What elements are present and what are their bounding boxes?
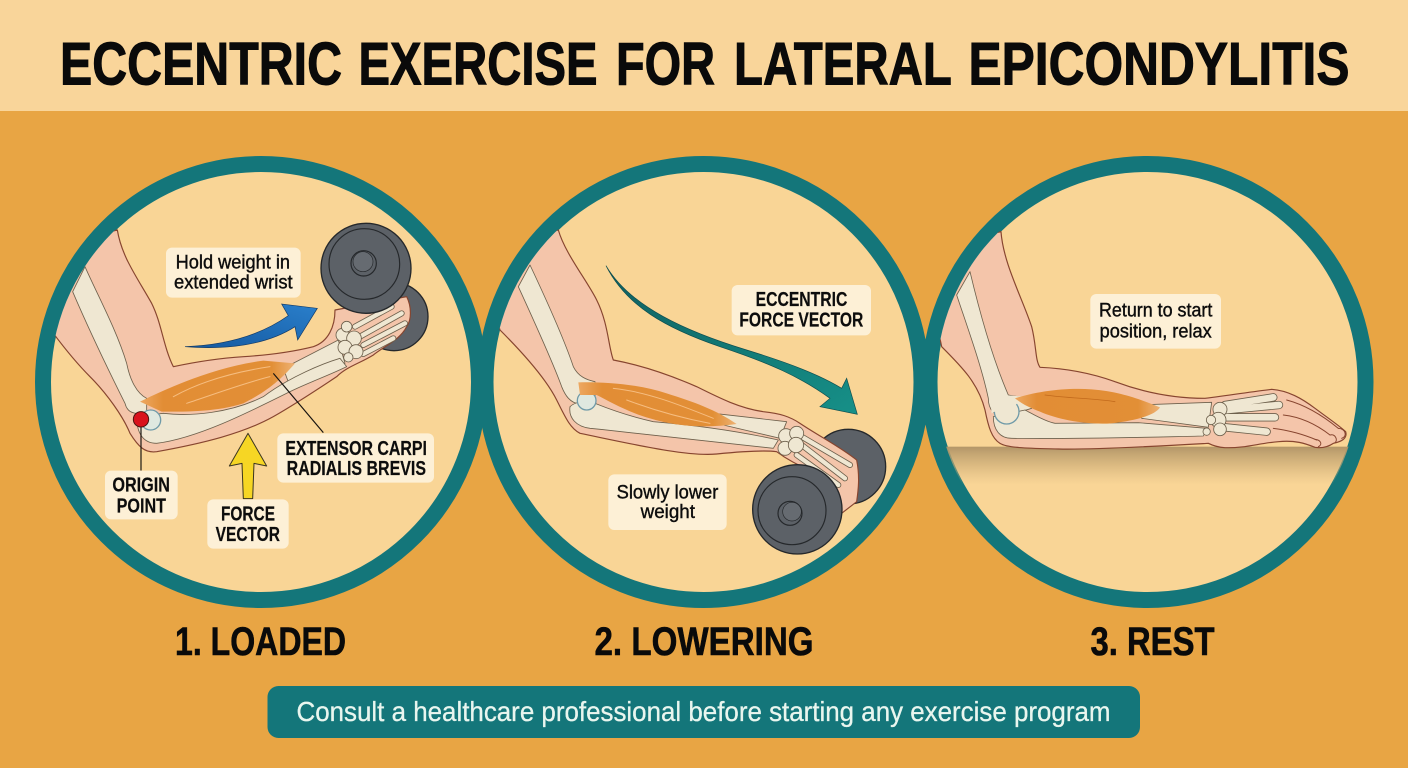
radius bone xyxy=(285,340,346,381)
label: force vector: VECTOR xyxy=(216,524,280,546)
hand bones xyxy=(355,307,405,354)
panel: step 1 loaded circle xyxy=(43,164,479,600)
disclaimer banner: Consult a healthcare professional before starting any exercise program xyxy=(296,696,1110,727)
hand bones inner xyxy=(797,437,850,485)
table surface xyxy=(946,446,1348,484)
icon: dumbbell rear plate xyxy=(824,428,886,504)
title: LATERAL xyxy=(734,30,951,98)
label: extensor carpi radialis brevis xyxy=(277,433,434,483)
label: hold weight: Hold weight in xyxy=(176,252,290,273)
label: return to start: Return to start xyxy=(1099,301,1213,322)
arm skin xyxy=(477,230,859,513)
disclaimer banner xyxy=(268,686,1140,738)
humerus bone xyxy=(73,267,147,414)
icon: dumbbell front plate xyxy=(753,465,842,554)
label: slowly lower weight xyxy=(608,474,727,530)
muscle: extensor carpi radialis brevis xyxy=(140,361,295,412)
label: eccentric force vector: FORCE VECTOR xyxy=(739,310,864,332)
lower humerus end xyxy=(991,395,1022,414)
finger creases xyxy=(1273,400,1338,440)
label: extensor carpi radialis brevis: EXTENSOR CARPI xyxy=(285,438,427,460)
ulna bone xyxy=(993,410,1207,439)
marker: origin point xyxy=(133,412,149,427)
title: EXERCISE xyxy=(358,30,598,98)
arrow: blue motion xyxy=(185,304,317,348)
panel: step 3 rest circle xyxy=(930,164,1366,600)
label: origin point xyxy=(105,471,178,519)
carpal bones xyxy=(336,321,363,362)
humerus bone xyxy=(518,265,595,404)
ulna bone xyxy=(137,358,347,443)
title: ECCENTRIC xyxy=(60,30,342,98)
label: origin point: ORIGIN xyxy=(112,475,170,497)
illustration: lowering arm with dumbbell xyxy=(477,230,886,554)
carpal bones xyxy=(1203,402,1227,436)
leader line: muscle xyxy=(273,373,323,433)
ulna bone xyxy=(570,402,778,448)
illustration: loaded arm with dumbbell xyxy=(33,223,434,549)
label: force vector xyxy=(207,499,289,549)
muscle: extensor xyxy=(578,382,737,426)
step heading 1: 1. LOADED xyxy=(175,620,346,664)
icon: dumbbell front plate xyxy=(321,223,411,313)
radius bone xyxy=(1138,402,1212,427)
origin point ring xyxy=(141,410,161,430)
elbow joint ring xyxy=(994,399,1019,424)
label: hold weight: extended wrist xyxy=(174,272,293,293)
muscle fibres xyxy=(1045,395,1115,402)
label: return to start: position, relax xyxy=(1100,321,1212,342)
illustration: resting arm on table xyxy=(922,232,1372,485)
hand bones xyxy=(797,437,850,485)
arrow: teal eccentric force xyxy=(606,266,857,414)
title: FOR xyxy=(616,30,715,98)
label: extensor carpi radialis brevis: RADIALIS BREVIS xyxy=(287,458,426,480)
elbow joint ring xyxy=(577,391,596,410)
label: force vector: FORCE xyxy=(221,504,275,526)
hand bones inner xyxy=(1225,397,1279,432)
panel: step 2 lowering circle xyxy=(486,164,922,600)
icon: dumbbell rear plate xyxy=(382,285,429,352)
arrow: yellow force vector xyxy=(229,433,267,499)
fingernails xyxy=(1315,428,1345,447)
hand bones xyxy=(1225,397,1279,432)
step heading 2: 2. LOWERING xyxy=(594,620,814,664)
humerus bone xyxy=(957,272,1032,417)
leader line: origin xyxy=(139,427,143,471)
label: return to start xyxy=(1090,294,1221,349)
label: slowly lower weight: Slowly lower xyxy=(617,482,719,503)
muscle fibres xyxy=(613,388,713,423)
step heading 3: 3. REST xyxy=(1090,620,1214,664)
muscle fibres xyxy=(173,367,270,403)
label: eccentric force vector xyxy=(732,285,871,335)
header band xyxy=(0,0,1408,111)
label: eccentric force vector: ECCENTRIC xyxy=(756,289,847,311)
label: slowly lower weight: weight xyxy=(640,502,696,523)
hand bones inner xyxy=(355,307,405,354)
arm skin xyxy=(33,230,410,452)
label: origin point: POINT xyxy=(117,495,166,517)
label: hold weight xyxy=(166,248,301,298)
radius bone xyxy=(713,413,787,438)
carpal bones xyxy=(778,426,804,455)
arm skin xyxy=(922,232,1346,449)
muscle: extensor xyxy=(1015,389,1160,424)
